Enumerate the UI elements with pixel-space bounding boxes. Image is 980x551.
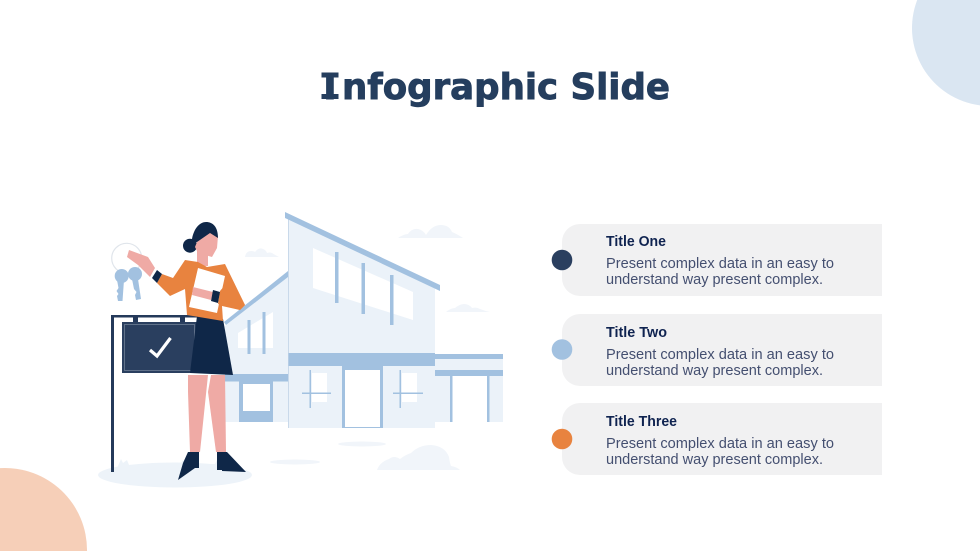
hair <box>192 222 218 244</box>
body text <box>606 436 834 468</box>
forearm <box>218 284 245 310</box>
body text: understand way present complex. <box>606 363 823 379</box>
title: nfographic Slide <box>342 67 670 108</box>
left wing <box>225 275 288 422</box>
marker <box>552 250 572 270</box>
panel: title three <box>552 403 882 475</box>
panel: title two <box>552 314 882 386</box>
body text: understand way present complex. <box>606 452 823 468</box>
clouds and ground shapes <box>245 225 490 470</box>
illustration: keys <box>112 243 142 301</box>
body text: Present complex data in an easy to <box>606 256 834 272</box>
cuff <box>211 290 220 303</box>
paper <box>189 268 225 313</box>
skirt <box>190 316 233 375</box>
body text <box>606 347 834 379</box>
decorative circle: top right <box>912 0 980 105</box>
decorative circle: bottom left <box>0 468 87 551</box>
illustration: ground shadow <box>98 458 252 488</box>
marker <box>552 429 572 449</box>
title: I <box>323 67 337 108</box>
hair bun <box>183 239 197 253</box>
panel: title one <box>552 224 882 296</box>
marker <box>552 339 572 360</box>
raised hand <box>127 250 155 277</box>
icon: check mark <box>150 338 170 356</box>
heading: Title Three <box>606 414 677 430</box>
illustration: for-sale sign <box>111 315 197 472</box>
sweater <box>157 260 245 321</box>
heading: Title One <box>606 234 666 250</box>
legs <box>188 375 208 452</box>
heading: Title Two <box>606 325 667 341</box>
shoes <box>178 452 199 480</box>
body text <box>606 256 834 288</box>
illustration: house <box>224 212 503 470</box>
raised cuff <box>152 270 162 283</box>
main house <box>288 219 435 428</box>
body text: Present complex data in an easy to <box>606 436 834 452</box>
hand on paper <box>192 287 213 300</box>
neck <box>197 250 208 266</box>
body text: Present complex data in an easy to <box>606 347 834 363</box>
illustration: woman with clipboard <box>127 222 246 480</box>
face <box>195 231 218 257</box>
body text: understand way present complex. <box>606 272 823 288</box>
garage <box>435 354 503 422</box>
